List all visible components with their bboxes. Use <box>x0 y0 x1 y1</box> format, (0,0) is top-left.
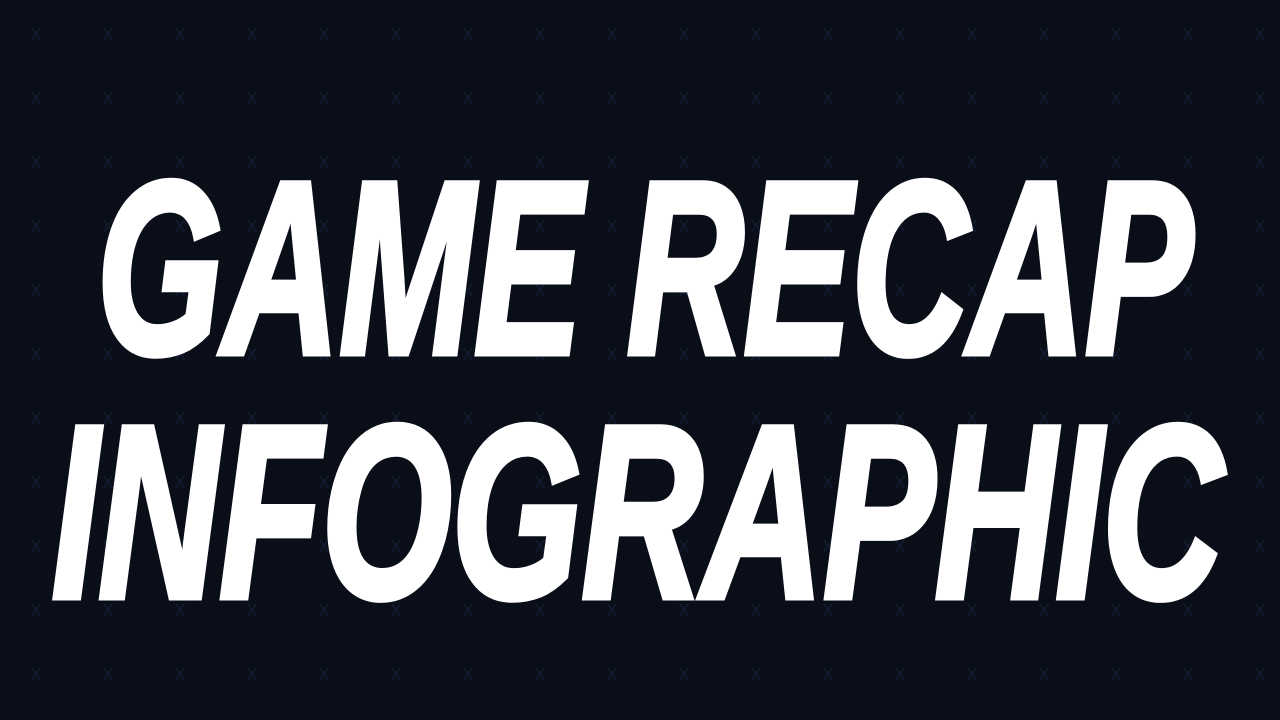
title <box>52 131 1225 650</box>
